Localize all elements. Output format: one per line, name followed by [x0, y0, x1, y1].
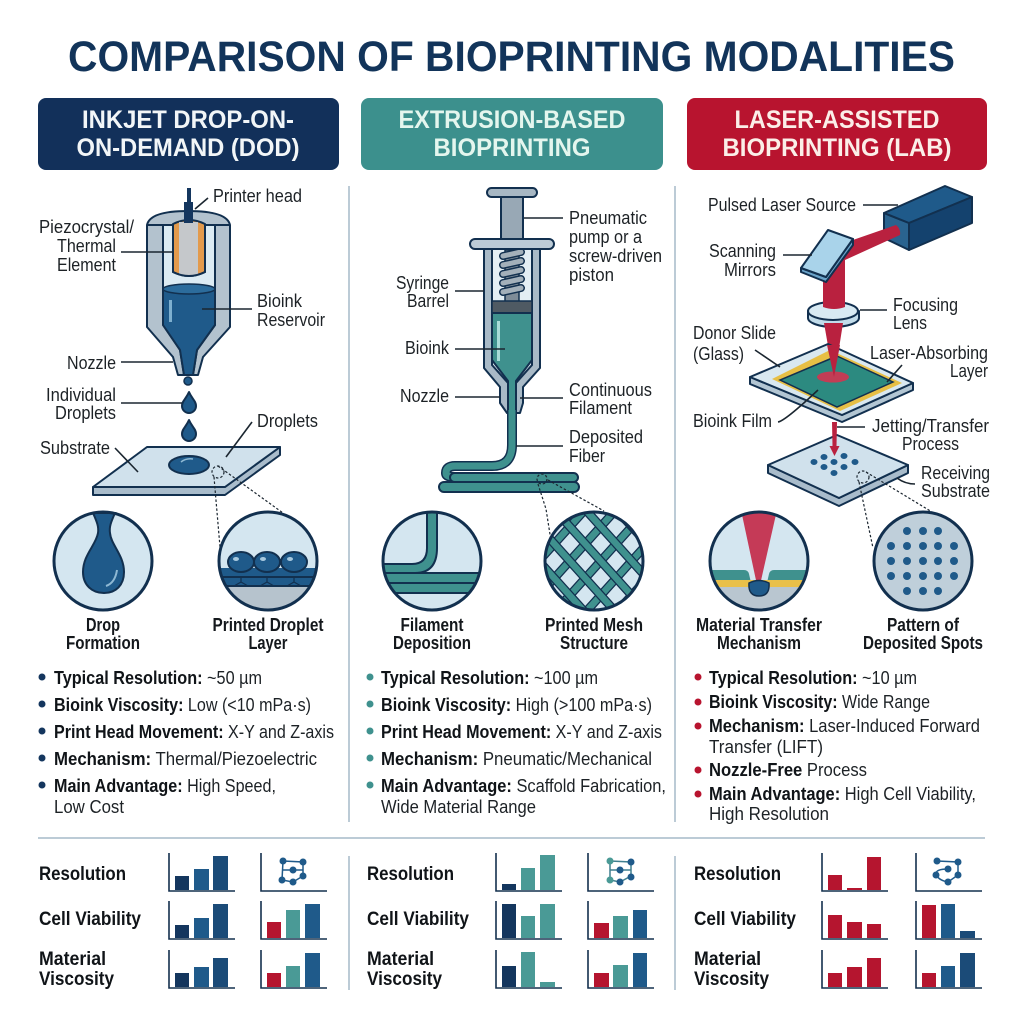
bullet list: laser: High Resolution: [709, 804, 829, 824]
heading: inkjet: INKJET DROP-ON-: [82, 106, 294, 134]
detail: material transfer mechanism: Material Transfer: [696, 615, 822, 635]
bullet list: extrusion: Wide Material Range: [381, 797, 536, 817]
labels: extrusion diagram: Pneumatic: [569, 208, 647, 228]
diagram: substrate with droplet: [93, 447, 283, 547]
bullet list: extrusion: [366, 668, 666, 817]
bullet list: laser: Mechanism: Laser-Induced Forward: [709, 716, 980, 736]
detail: pattern of deposited spots: Pattern of: [887, 615, 960, 635]
labels: extrusion diagram: Nozzle: [400, 386, 449, 406]
labels: laser diagram: [693, 195, 990, 501]
panel: inkjet drop-on-demand: [38, 98, 339, 817]
labels: laser diagram: Substrate: [921, 481, 990, 501]
labels: laser diagram: Mirrors: [724, 260, 776, 280]
heading: extrusion: [361, 98, 663, 170]
bullet list: laser: Nozzle-Free Process: [709, 760, 867, 780]
comparison charts: laser: Cell Viability: [694, 909, 796, 930]
comparison charts: extrusion: Cell Viability: [367, 909, 469, 930]
labels: extrusion diagram: Barrel: [407, 291, 449, 311]
labels: extrusion diagram: Bioink: [405, 338, 450, 358]
detail: printed mesh structure: Structure: [560, 633, 628, 653]
bullet list: inkjet: Low Cost: [54, 797, 124, 817]
comparison charts: extrusion: Viscosity: [367, 969, 442, 990]
bullet list: inkjet: Bioink Viscosity: Low (<10 mPa·s): [54, 695, 311, 715]
detail: printed mesh structure: [544, 510, 644, 649]
labels: laser diagram: Process: [902, 434, 959, 454]
labels: extrusion diagram: Deposited: [569, 427, 643, 447]
bullet list: extrusion: Bioink Viscosity: High (>100 mPa·s): [381, 695, 652, 715]
heading: extrusion: EXTRUSION-BASED: [398, 106, 626, 134]
bullet list: inkjet: Mechanism: Thermal/Piezoelectric: [54, 749, 317, 769]
bullet list: laser: [694, 668, 980, 824]
labels: extrusion diagram: pump or a: [569, 227, 643, 247]
labels: laser diagram: Bioink Film: [693, 411, 772, 431]
diagram: jetting arrow: [830, 422, 840, 456]
labels: laser diagram: Laser-Absorbing: [870, 343, 988, 363]
comparison charts: extrusion: [367, 853, 654, 990]
detail: printed droplet layer: Printed Droplet: [212, 615, 324, 635]
comparison charts: laser: Viscosity: [694, 969, 769, 990]
heading: laser-assisted: LASER-ASSISTED: [734, 106, 940, 134]
labels: laser diagram: Focusing: [893, 295, 958, 315]
detail: printed mesh structure: Printed Mesh: [545, 615, 643, 635]
labels: inkjet diagram: Printer head: [213, 186, 302, 206]
labels: laser diagram: Donor Slide: [693, 323, 776, 343]
labels: extrusion diagram: piston: [569, 265, 614, 285]
labels: extrusion diagram: Continuous: [569, 380, 652, 400]
labels: laser diagram: (Glass): [693, 344, 744, 364]
bullet list: inkjet: Print Head Movement: X-Y and Z-axis: [54, 722, 334, 742]
detail: drop formation: [54, 512, 152, 653]
bullet list: laser: Main Advantage: High Cell Viability,: [709, 784, 976, 804]
bullet list: extrusion: Typical Resolution: ~100 µm: [381, 668, 598, 688]
diagram: inkjet print head: [147, 188, 230, 441]
comparison charts: inkjet: [39, 853, 327, 990]
labels: inkjet diagram: Nozzle: [67, 353, 116, 373]
detail: filament deposition: Filament: [400, 615, 464, 635]
labels: inkjet diagram: Thermal: [57, 236, 116, 256]
title: COMPARISON OF BIOPRINTING MODALITIES: [68, 33, 955, 81]
detail: printed droplet layer: [212, 512, 324, 653]
detail: filament deposition: [382, 510, 482, 653]
bullet list: laser: Transfer (LIFT): [709, 737, 823, 757]
bullet list: extrusion: Mechanism: Pneumatic/Mechanical: [381, 749, 652, 769]
labels: laser diagram: Receiving: [921, 463, 990, 483]
bullet list: laser: Typical Resolution: ~10 µm: [709, 668, 917, 688]
detail: material transfer mechanism: [696, 510, 822, 653]
heading: inkjet: [38, 98, 339, 170]
labels: laser diagram: Jetting/Transfer: [872, 416, 989, 436]
detail: pattern of deposited spots: Deposited Spots: [863, 633, 983, 653]
labels: extrusion diagram: screw-driven: [569, 246, 662, 266]
labels: inkjet diagram: Reservoir: [257, 310, 325, 330]
bullet list: inkjet: Main Advantage: High Speed,: [54, 776, 276, 796]
labels: inkjet diagram: Substrate: [40, 438, 110, 458]
diagram: laser optics: [801, 186, 972, 380]
comparison charts: inkjet: Cell Viability: [39, 909, 141, 930]
labels: inkjet diagram: Bioink: [257, 291, 303, 311]
labels: inkjet diagram: Element: [57, 255, 116, 275]
labels: extrusion diagram: Filament: [569, 398, 632, 418]
heading: inkjet: ON-DEMAND (DOD): [76, 134, 300, 162]
detail: pattern of deposited spots: [863, 512, 983, 653]
heading: laser-assisted: [687, 98, 987, 170]
labels: inkjet diagram: Droplets: [55, 403, 116, 423]
labels: inkjet diagram: Piezocrystal/: [39, 217, 134, 237]
detail: drop formation: Formation: [66, 633, 140, 653]
labels: extrusion diagram: Fiber: [569, 446, 605, 466]
heading: extrusion: BIOPRINTING: [434, 134, 590, 162]
comparison charts: inkjet: Viscosity: [39, 969, 114, 990]
labels: laser diagram: Layer: [950, 361, 988, 381]
panel: extrusion-based: [361, 98, 695, 817]
bullet list: inkjet: [38, 668, 334, 817]
labels: laser diagram: Scanning: [709, 241, 776, 261]
comparison charts: laser: [694, 853, 982, 990]
labels: inkjet diagram: Individual: [46, 385, 116, 405]
bullet list: extrusion: Print Head Movement: X-Y and Z-axis: [381, 722, 662, 742]
panel: laser-assisted: [687, 98, 990, 824]
comparison charts: laser: Resolution: [694, 864, 781, 885]
detail: drop formation: Drop: [86, 615, 120, 635]
heading: laser-assisted: BIOPRINTING (LAB): [722, 134, 952, 162]
diagram: syringe: [470, 188, 554, 413]
comparison charts: extrusion: Material: [367, 949, 434, 970]
bullet list: extrusion: Main Advantage: Scaffold Fabrication,: [381, 776, 666, 796]
detail: material transfer mechanism: Mechanism: [717, 633, 801, 653]
bullet list: inkjet: Typical Resolution: ~50 µm: [54, 668, 262, 688]
labels: laser diagram: Lens: [893, 313, 927, 333]
diagram: deposited filament: [439, 410, 604, 547]
labels: inkjet diagram: [39, 186, 325, 472]
bullet list: laser: Bioink Viscosity: Wide Range: [709, 692, 930, 712]
labels: extrusion diagram: Syringe: [396, 273, 449, 293]
labels: extrusion diagram: [396, 208, 662, 466]
comparison charts: laser: Material: [694, 949, 761, 970]
detail: filament deposition: Deposition: [393, 633, 471, 653]
detail: printed droplet layer: Layer: [248, 633, 288, 653]
diagram: receiving substrate: [768, 435, 932, 548]
diagram: donor slide: [750, 344, 913, 422]
comparison charts: inkjet: Resolution: [39, 864, 126, 885]
comparison charts: inkjet: Material: [39, 949, 106, 970]
comparison charts: extrusion: Resolution: [367, 864, 454, 885]
labels: inkjet diagram: Droplets: [257, 411, 318, 431]
labels: laser diagram: Pulsed Laser Source: [708, 195, 856, 215]
